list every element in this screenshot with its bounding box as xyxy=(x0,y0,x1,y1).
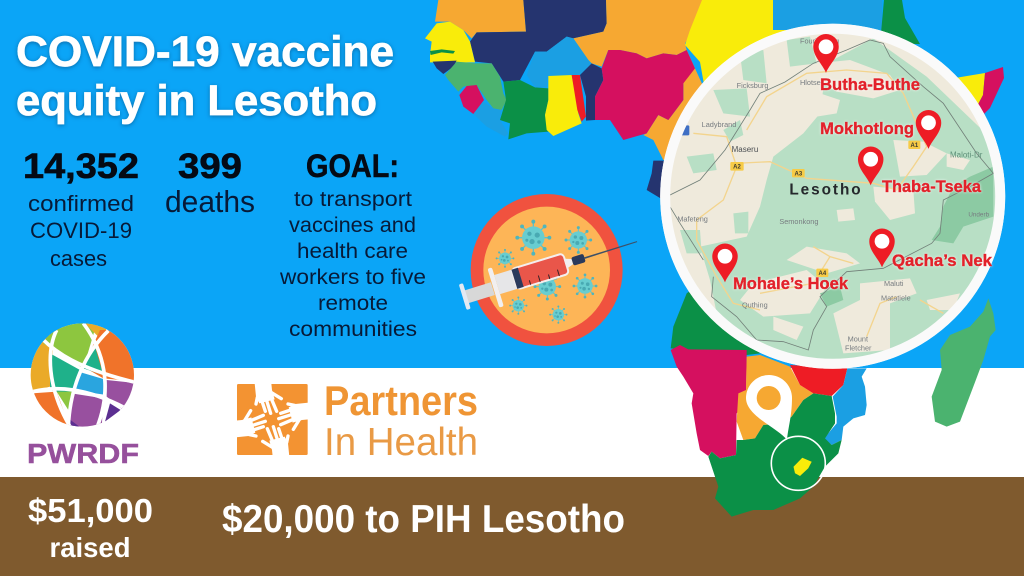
Lesotho label: Lesotho xyxy=(789,182,861,199)
stat: deaths: deaths xyxy=(165,184,255,219)
logo: Partners In Health: Partners xyxy=(324,377,478,424)
funding to PIH Lesotho: $20,000 to PIH Lesotho xyxy=(222,498,625,541)
airport badge xyxy=(682,125,690,136)
road shields: A2 xyxy=(733,164,741,170)
funding raised xyxy=(28,492,153,563)
marker: Thaba-Tseka xyxy=(858,146,982,196)
goal text block xyxy=(279,148,426,341)
green terrain xyxy=(680,37,1007,370)
beige patches xyxy=(740,60,970,353)
goal text block: remote xyxy=(318,292,388,315)
East Africa countries xyxy=(685,0,1004,118)
marker: Butha-Buthe xyxy=(813,34,920,94)
place names: Mafeteng xyxy=(677,214,708,223)
place names: Quthing xyxy=(742,300,768,309)
marker: Butha-Buthe: Butha-Buthe xyxy=(820,75,920,94)
road shields: A4 xyxy=(819,271,827,277)
place names: Ficksburg xyxy=(737,81,768,90)
map of Lesotho in circle xyxy=(660,20,1024,370)
globe xyxy=(30,323,134,427)
blue background band xyxy=(0,0,1024,368)
marker: Mokhotlong xyxy=(820,110,941,149)
stat: deaths: 399 xyxy=(178,147,242,186)
place names: Underb xyxy=(968,212,990,219)
place names: Matatiele xyxy=(881,294,911,303)
stat: confirmed cases: COVID-19 xyxy=(30,218,132,243)
goal text block: GOAL: xyxy=(306,148,399,184)
road shields xyxy=(730,141,920,277)
marker: Thaba-Tseka: Thaba-Tseka xyxy=(882,177,982,196)
goal text block: vaccines and xyxy=(289,214,416,237)
West and Central Africa countries xyxy=(425,0,703,200)
Madagascar xyxy=(932,298,996,427)
goal text block: health care xyxy=(297,240,408,263)
white logo band xyxy=(0,368,1024,477)
place names: Semonkong xyxy=(779,217,818,226)
funding raised: $51,000 xyxy=(28,492,153,529)
marker: Qacha's Nek xyxy=(869,228,993,270)
icon: vaccine syringe and viruses xyxy=(457,194,644,346)
place names: Fletcher xyxy=(845,344,872,353)
funding raised: raised xyxy=(50,532,130,563)
logo: Partners In Health: In Health xyxy=(324,421,478,464)
goal text block: communities xyxy=(289,318,417,341)
place names: Ladybrand xyxy=(702,120,736,129)
community markers xyxy=(712,34,993,293)
stat: confirmed cases: confirmed xyxy=(28,191,134,216)
icon: white location pin xyxy=(746,375,792,440)
Southern Africa countries xyxy=(671,283,996,517)
road shields: A3 xyxy=(795,171,803,177)
title: COVID-19 vaccine xyxy=(16,28,394,76)
place names: Mount xyxy=(848,334,868,343)
logo: PWRDF: PWRDF xyxy=(27,438,139,469)
stat: deaths xyxy=(165,147,255,219)
brown funding band xyxy=(0,477,1024,576)
logo: PWRDF xyxy=(27,322,139,469)
goal text block: workers to five xyxy=(279,266,426,289)
stat: confirmed cases: cases xyxy=(50,246,107,271)
logo: Partners In Health xyxy=(235,377,478,464)
marker: Mohale's Hoek: Mohale’s Hoek xyxy=(733,274,849,293)
map of Africa xyxy=(425,0,1004,517)
place names: Maseru xyxy=(732,145,758,154)
place names: Maloti-Dr xyxy=(950,150,983,159)
marker: Mohale's Hoek xyxy=(712,243,849,293)
place names: Fouriesburg xyxy=(800,36,839,45)
roads xyxy=(693,70,943,337)
goal text block: to transport xyxy=(294,188,412,211)
place names: Hlotse xyxy=(800,78,821,87)
Lesotho highlight with ring xyxy=(771,436,825,490)
stat: confirmed cases: 14,352 xyxy=(23,147,139,186)
marker: Mokhotlong: Mokhotlong xyxy=(820,119,914,138)
national border xyxy=(667,40,993,350)
syringe xyxy=(457,225,644,317)
title xyxy=(16,28,394,125)
marker: Qacha's Nek: Qacha’s Nek xyxy=(892,251,993,270)
title: equity in Lesotho xyxy=(16,77,377,125)
hands icon xyxy=(235,383,309,457)
darker green xyxy=(932,167,993,243)
place names: Maluti xyxy=(884,279,904,288)
road shields: A1 xyxy=(911,143,919,149)
place names xyxy=(677,36,990,353)
stat: confirmed cases xyxy=(23,147,139,271)
